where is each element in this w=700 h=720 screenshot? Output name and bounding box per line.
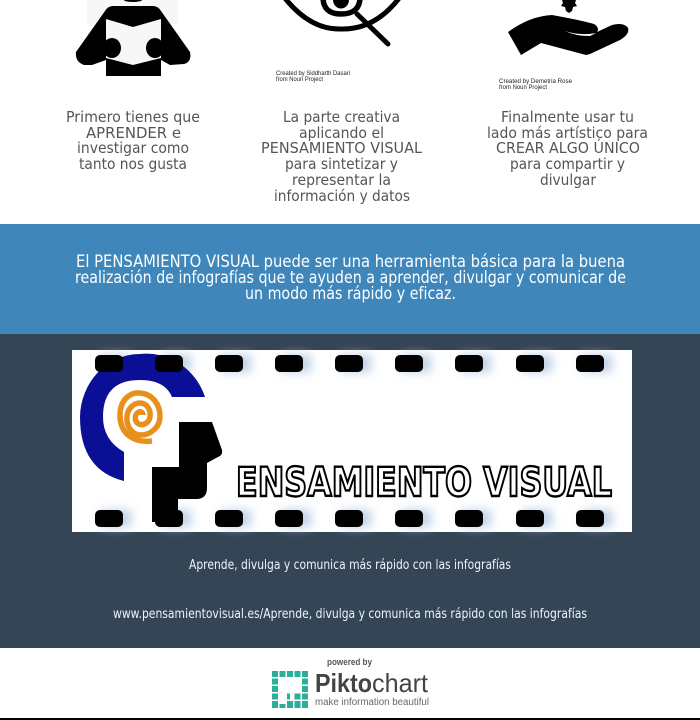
logo wordmark: ENSAMIENTO VISUAL	[236, 460, 612, 506]
text block: create: lado más artístico para	[487, 124, 648, 142]
logo head silhouette	[152, 422, 222, 522]
text block: create: divulgar	[540, 171, 597, 189]
panel: blue statement band	[0, 224, 700, 334]
panel: blue statement band: realización de infografías que te ayuden a aprender, divulgar y comunicar de	[75, 268, 626, 287]
logo orange spiral	[120, 393, 160, 441]
credit: hand icon: Created by Demetria Rose	[499, 78, 572, 85]
icon: hand holding a seed	[508, 0, 628, 55]
text block: learn: Primero tienes que	[66, 108, 200, 126]
text block: visual thinking	[261, 108, 422, 205]
source url: www.pensamientovisual.es/Aprende, divulga y comunica más rápido con las infografías	[113, 607, 587, 622]
text block: visual thinking: representar la	[292, 171, 391, 189]
credit: eye icon	[276, 70, 350, 83]
text block: create	[487, 108, 648, 189]
text block: learn: tanto nos gusta	[79, 155, 187, 173]
text block: visual thinking: información y datos	[274, 187, 410, 205]
text block: create: CREAR ALGO ÚNICO	[496, 138, 640, 157]
film hole glow	[101, 355, 612, 527]
text block: visual thinking: PENSAMIENTO VISUAL	[261, 139, 422, 157]
tagline: make information beautiful	[315, 697, 429, 708]
logo image: film strip with Pensamiento Visual	[72, 350, 632, 532]
text block: learn	[66, 108, 200, 173]
film holes	[95, 355, 604, 527]
panel: blue statement band: un modo más rápido y eficaz.	[245, 284, 456, 303]
icon: person reading a book	[76, 0, 190, 76]
text block: visual thinking: La parte creativa	[283, 108, 400, 126]
Piktochart branding	[272, 657, 429, 708]
text block: visual thinking: aplicando el	[299, 124, 384, 142]
bottom black strip	[0, 718, 700, 720]
panel: blue statement band: El PENSAMIENTO VISUAL puede ser una herramienta básica para la buena	[76, 252, 625, 271]
text block: visual thinking: para sintetizar y	[285, 155, 398, 173]
Piktochart logo mark	[272, 671, 308, 708]
Piktochart branding: chart	[372, 668, 429, 698]
text block: learn: APRENDER e	[86, 124, 181, 142]
credit: eye icon: Created by Siddharth Dasari	[276, 70, 350, 77]
logo blue arc	[80, 354, 205, 481]
text block: create: para compartir y	[510, 155, 625, 173]
panel: dark footer band	[0, 334, 700, 648]
wordmark: Pikto	[315, 668, 372, 698]
powered by: powered by	[327, 657, 372, 667]
icon: eye with magnifier	[284, 0, 400, 44]
credit: hand icon: from Noun Project	[499, 84, 547, 91]
caption: Aprende, divulga y comunica más rápido con las infografías	[189, 558, 511, 573]
credit: hand icon	[499, 78, 572, 91]
credit: eye icon: from Noun Project	[276, 76, 323, 83]
text block: learn: investigar como	[77, 139, 189, 157]
text block: create: Finalmente usar tu	[501, 108, 634, 126]
